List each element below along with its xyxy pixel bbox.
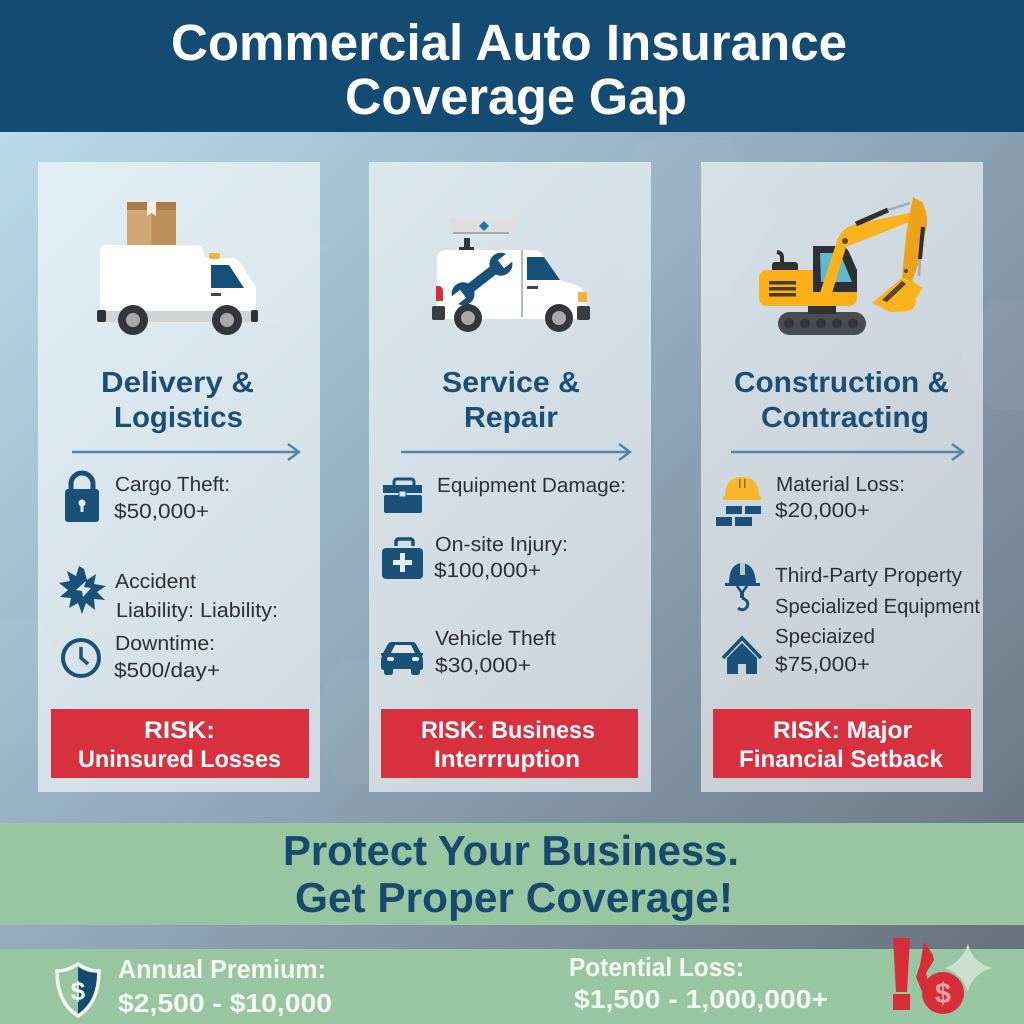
specialized text — [775, 625, 875, 676]
risk box: RISK: Business — [421, 717, 595, 744]
risk box: RISK: — [144, 717, 215, 744]
heading — [442, 367, 580, 434]
material loss text — [775, 473, 905, 522]
risk box: Interrruption — [434, 746, 580, 773]
risk box — [51, 709, 309, 778]
call to action band: Get Proper Coverage! — [295, 874, 733, 921]
cargo theft text: $50,000+ — [114, 500, 209, 523]
third-party property text: Third-Party Property — [775, 564, 963, 587]
heading: Repair — [464, 402, 558, 434]
accident liability text: Accident — [115, 570, 196, 593]
icon: house — [723, 638, 761, 674]
icon: helmet with crane hook — [725, 563, 760, 610]
risk box: Financial Setback — [739, 746, 944, 773]
risk box: RISK: Major — [773, 717, 912, 744]
potential loss: $1,500 - 1,000,000+ — [574, 984, 828, 1014]
downtime text — [114, 632, 220, 682]
heading — [734, 367, 949, 434]
accident liability text — [115, 570, 278, 622]
annual premium: $2,500 - $10,000 — [118, 988, 332, 1018]
icon: collision burst — [59, 566, 106, 614]
material loss text: Material Loss: — [776, 473, 905, 496]
panel: construction and contracting — [701, 162, 983, 792]
annual premium — [118, 954, 332, 1018]
on-site injury text: $100,000+ — [434, 559, 541, 582]
equipment damage text: Equipment Damage: — [437, 474, 626, 497]
vehicle theft text: $30,000+ — [435, 654, 531, 677]
material loss text: $20,000+ — [775, 499, 870, 522]
bottom summary band — [0, 938, 1024, 1024]
accident liability text: Liability: Liability: — [116, 599, 278, 622]
cargo theft text — [114, 473, 230, 523]
icon: hard hat and bricks — [716, 477, 761, 526]
header band — [0, 0, 1024, 132]
icon: toolbox — [383, 479, 422, 513]
potential loss: Potential Loss: — [569, 952, 744, 982]
icon: car — [381, 642, 423, 675]
cargo theft text: Cargo Theft: — [115, 473, 230, 496]
downtime text: Downtime: — [115, 632, 215, 655]
title — [171, 14, 847, 125]
potential loss — [569, 952, 828, 1014]
icon: excavator — [759, 197, 927, 335]
icon: medical kit — [382, 539, 423, 579]
panel: service and repair — [369, 162, 651, 792]
heading: Logistics — [114, 402, 243, 434]
specialized text: Speciaized — [775, 625, 875, 648]
third-party property text — [775, 564, 980, 618]
on-site injury text — [434, 533, 568, 582]
heading: Delivery & — [101, 367, 254, 399]
third-party property text: Specialized Equipment — [775, 595, 980, 618]
icon: dollar shield: $ — [71, 976, 86, 1006]
arrow — [72, 444, 299, 460]
icon: wrench — [446, 247, 518, 311]
vehicle theft text: Vehicle Theft — [435, 627, 556, 650]
arrow — [731, 444, 963, 460]
icon: padlock — [65, 473, 99, 522]
icon: clock — [63, 640, 99, 676]
risk box — [381, 709, 638, 778]
heading — [101, 367, 254, 434]
call to action band: Protect Your Business. — [283, 827, 739, 874]
heading: Construction & — [734, 367, 949, 399]
risk box — [713, 709, 971, 778]
icon: broken exclamation and dollar coin — [893, 938, 964, 1014]
heading: Service & — [442, 367, 580, 399]
specialized text: $75,000+ — [775, 653, 870, 676]
annual premium: Annual Premium: — [118, 954, 326, 984]
downtime text: $500/day+ — [114, 659, 220, 682]
icon: delivery van with box — [97, 202, 258, 335]
on-site injury text: On-site Injury: — [435, 533, 568, 556]
arrow — [401, 444, 630, 460]
heading: Contracting — [761, 402, 929, 434]
risk box: Uninsured Losses — [78, 746, 281, 773]
call to action band — [0, 823, 1024, 925]
panel: delivery and logistics — [38, 162, 320, 792]
icon: broken exclamation and dollar coin: $ — [935, 978, 951, 1010]
title: Coverage Gap — [345, 68, 687, 125]
icon: service van with wrench — [432, 219, 590, 332]
icon: sparkle — [945, 944, 992, 992]
title: Commercial Auto Insurance — [171, 14, 847, 71]
icon: dollar shield — [57, 964, 99, 1016]
vehicle theft text — [435, 627, 556, 677]
